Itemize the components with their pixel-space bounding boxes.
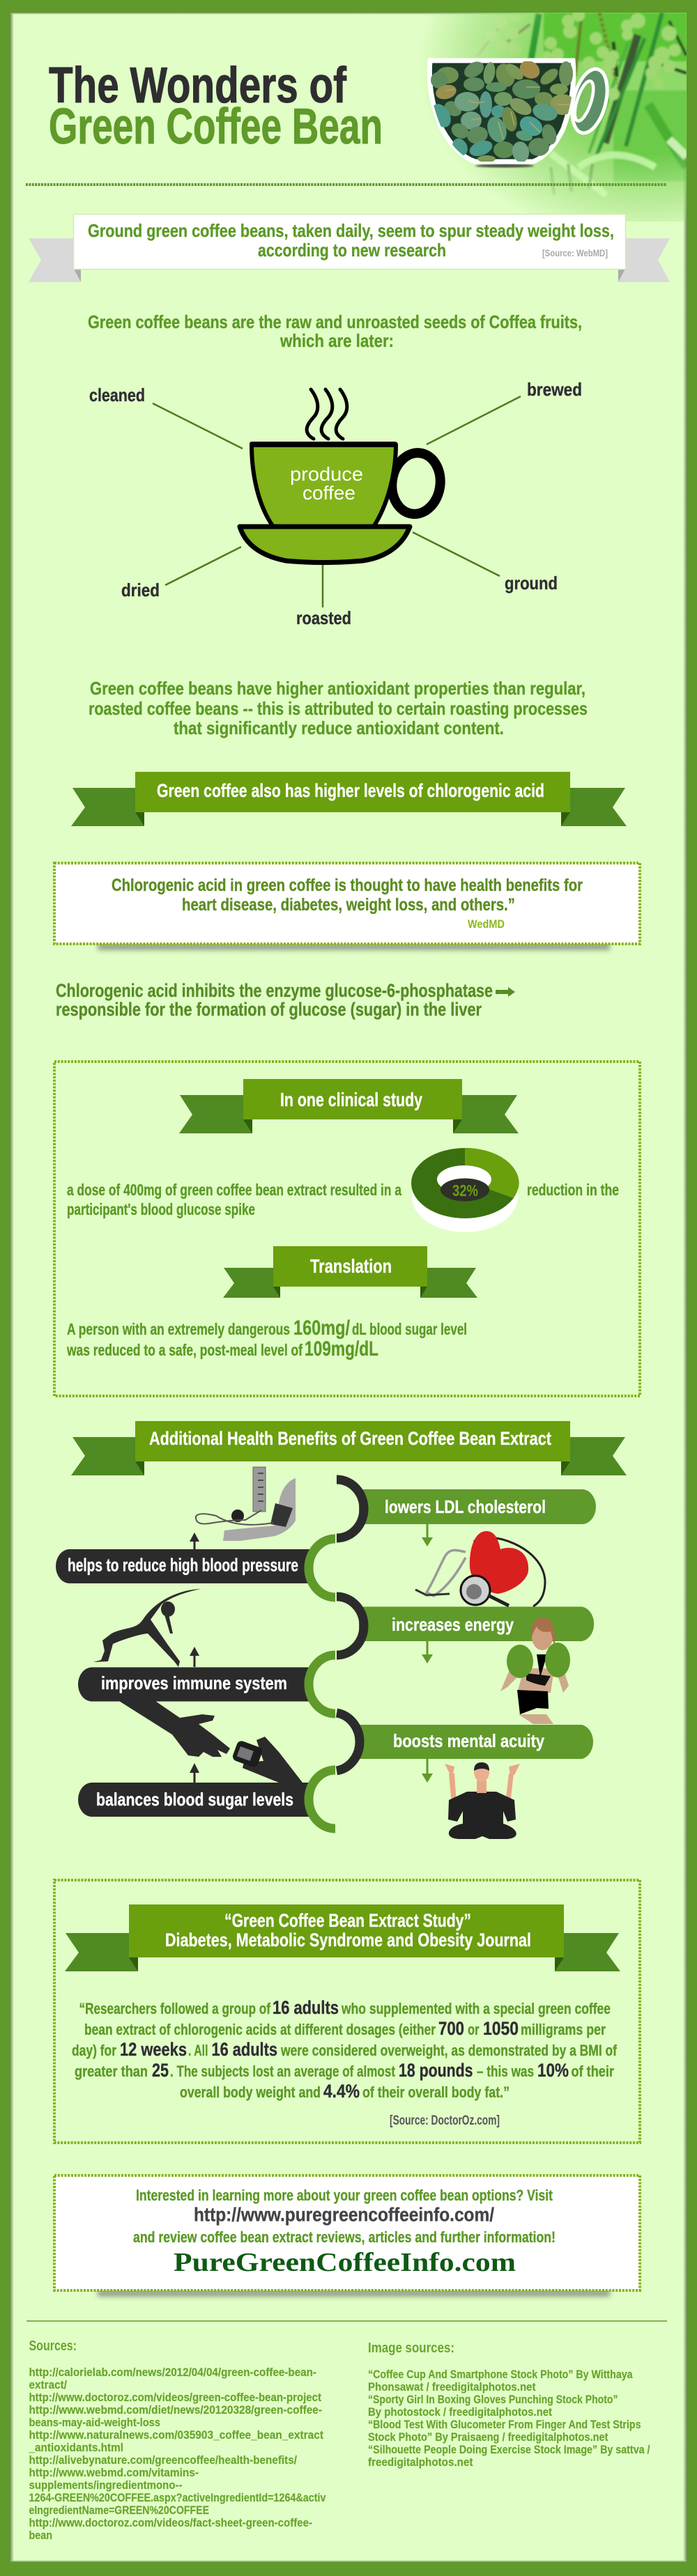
benefit labels: lowers LDL cholesterol [385,1496,546,1517]
text: raw and unroasted seeds [88,311,582,351]
title [49,58,383,155]
image sources list [368,2341,650,2469]
process labels: roasted [296,607,351,628]
translation text: 109mg/dL [305,1337,378,1360]
translation text [66,1317,467,1360]
connector arcs: dark [337,1480,364,1771]
study paragraph: 25 [152,2060,169,2081]
sources list: Sources: [29,2338,77,2354]
call to action box [54,2175,640,2297]
study paragraph [72,1997,618,2102]
study paragraph: 16 adults [273,1997,339,2018]
study text: reduction in the [527,1181,619,1199]
ribbon heading: study journal: “Green Coffee Bean Extract Study” [224,1910,471,1931]
panel: clinical study [54,1062,640,1396]
ribbon heading: study journal [65,1904,620,1971]
ribbon heading: additional health benefits [71,1421,627,1475]
translation text: A person with an extremely dangerous [67,1320,290,1338]
sources list: supplements/ingredientmono-- [29,2479,183,2492]
quote box: WebMD: heart disease, diabetes, weight loss, and others.” [182,895,515,915]
study paragraph: who supplemented with a special green coffee [341,2000,611,2017]
process labels: ground [505,573,558,593]
donut chart: 32%: 32% [452,1181,478,1200]
image sources list: By photostock / freedigitalphotos.net [368,2406,552,2419]
ribbon heading: in one clinical study [179,1079,519,1133]
benefit labels: improves immune system [101,1673,287,1693]
sources list: 1264-GREEN%20COFFEE.aspx?activeIngredientId=1264&activ [29,2492,326,2504]
study paragraph: were considered overweight, as demonstrated by a BMI of [280,2042,618,2059]
text: raw and unroasted seeds: Green coffee beans are the raw and unroasted seeds of Coffea fruits, [88,311,582,332]
ribbon heading: study journal: Diabetes, Metabolic Syndrome and Obesity Journal [165,1930,531,1950]
image sources list: Stock Photo” By Praisaeng / freedigitalphotos.net [368,2431,608,2444]
arrows: dark up [190,1533,199,1783]
study paragraph: 10% [537,2060,569,2081]
sources list [29,2338,326,2542]
sources list: eIngredientName=GREEN%20COFFEE [29,2504,209,2517]
icon: arrow [496,987,515,997]
study source: [Source: DoctorOz.com] [390,2113,500,2128]
quote box: WebMD [54,863,640,950]
benefit labels [68,1496,546,1810]
ribbon heading: translation: Translation [310,1255,392,1277]
text: enzyme inhibition: Chlorogenic acid inhibits the enzyme glucose-6-phosphatase [56,980,493,1001]
translation text: dL blood sugar level [352,1320,467,1338]
ribbon banner: weight loss claim [29,215,670,282]
process labels: dried [121,580,160,600]
icon: cup rim [250,442,397,447]
quote box: WebMD: Chlorogenic acid in green coffee is thought to have health benefits for [112,876,583,895]
study paragraph: day) for [72,2042,116,2059]
study paragraph: 16 adults [212,2039,277,2060]
diagram: coffee cup with process spokes [89,379,582,628]
text: antioxidant properties: that significantly reduce antioxidant content. [174,717,504,738]
study text [67,1181,619,1218]
sources list: beans-may-aid-weight-loss [29,2416,160,2429]
image sources list: “Blood Test With Glucometer From Finger And Test Strips [368,2419,641,2431]
sources list: http://www.naturalnews.com/035903_coffee_bean_extract [29,2429,323,2442]
image sources list: “Silhouette People Doing Exercise Stock Image” By sattva / [368,2444,650,2456]
icon: hands with glucometer [119,1701,302,1783]
connector arcs: green [309,1539,335,1829]
icon: exercise silhouette [93,1589,201,1667]
translation text: 160mg/ [293,1317,351,1340]
study paragraph: greater than [75,2063,148,2080]
ribbon heading: chlorogenic acid: Green coffee also has higher levels of chlorogenic acid [157,780,544,801]
ribbon banner: weight loss claim: [Source: WebMD] [542,247,608,258]
text: enzyme inhibition: responsible for the formation of glucose (sugar) in the liver [56,999,482,1020]
sources list: _antioxidants.html [29,2442,123,2454]
icon: steam [307,389,347,439]
text: antioxidant properties: Green coffee beans have higher antioxidant properties than regular, [90,678,585,699]
footer divider [26,2320,667,2322]
image sources list: freedigitalphotos.net [368,2456,473,2469]
study paragraph: – this was [477,2063,534,2080]
study paragraph: 18 pounds [399,2060,473,2081]
study text: a dose of 400mg of green coffee bean extract resulted in a [67,1181,401,1199]
sources list: http://www.doctoroz.com/videos/green-coffee-bean-project [29,2391,321,2404]
study paragraph: “Researchers followed a group of [79,2000,271,2017]
icon: blood pressure monitor [196,1467,296,1541]
sources list: http://alivebynature.com/greencoffee/health-benefits/ [29,2454,297,2467]
study paragraph: overall body weight and [180,2084,321,2101]
sources list: http://www.webmd.com/vitamins- [29,2467,199,2479]
process labels: brewed [527,379,582,400]
study paragraph: or [468,2021,480,2038]
sources list: http://www.doctoroz.com/videos/fact-sheet-green-coffee- [29,2517,312,2529]
process labels: cleaned [89,385,145,405]
quote box: WebMD: WedMD [468,917,505,931]
call to action box: and review coffee bean extract reviews, articles and further information! [133,2228,556,2246]
title: The Wonders of [49,58,347,114]
study paragraph: 12 weeks [120,2039,187,2060]
translation text: was reduced to a safe, post-meal level of [66,1341,302,1359]
sources list: http://www.webmd.com/diet/news/20120328/green-coffee- [29,2404,322,2416]
study paragraph: . All [188,2042,208,2059]
benefit labels: boosts mental acuity [393,1730,544,1751]
header dotted divider [26,183,667,186]
benefit labels: balances blood sugar levels [96,1789,293,1810]
process labels [89,379,582,628]
panel: benefits flow [56,1467,596,1839]
study paragraph: 700 [438,2018,464,2039]
call to action box: PureGreenCoffeeInfo.com [174,2248,516,2277]
cup label [290,463,363,504]
ribbon banner: weight loss claim: according to new research [258,240,446,261]
icon: woman boxing [500,1617,570,1724]
text: antioxidant properties [89,678,588,738]
sources list: http://calorielab.com/news/2012/04/04/green-coffee-bean- [29,2366,316,2379]
study paragraph: 4.4% [323,2081,360,2102]
sources list: bean [29,2529,52,2542]
cup label: produce [290,463,363,485]
image sources list: Phonsawat / freedigitalphotos.net [368,2381,536,2393]
study paragraph: milligrams per [521,2021,606,2038]
ribbon heading: additional health benefits: Additional Health Benefits of Green Coffee Bean Extract [149,1428,551,1449]
panel: extract study [54,1880,640,2143]
icon: heart with stethoscope [415,1531,545,1606]
study paragraph: bean extract of chlorogenic acids at different dosages (either [84,2021,436,2038]
title: Green Coffee Bean [49,99,383,155]
study paragraph: of their [572,2063,614,2080]
pills: left benefits [56,1549,312,1817]
benefit labels: increases energy [392,1614,514,1635]
benefit labels: helps to reduce high blood pressure [68,1555,298,1576]
icon: meditating man [445,1762,520,1839]
pills: right benefits [359,1489,596,1759]
study paragraph: of their overall body fat.” [362,2084,510,2101]
image sources list: Image sources: [368,2341,454,2356]
icon: cup body [252,444,396,527]
sources list: extract/ [29,2379,67,2391]
ribbon heading: in one clinical study: In one clinical study [280,1089,422,1110]
arrows: green down [422,1524,433,1783]
ribbon heading: chlorogenic acid [71,772,627,826]
header plant photo background [418,9,687,222]
donut chart: 32% [411,1148,519,1232]
study text: participant's blood glucose spike [67,1200,255,1218]
cup label: coffee [302,482,355,504]
image sources list: “Coffee Cup And Smartphone Stock Photo” By Witthaya [368,2368,633,2381]
call to action box: Interested in learning more about your green coffee bean options? Visit [136,2187,553,2204]
text: antioxidant properties: roasted coffee beans -- this is attributed to certain roasting processes [89,698,588,719]
text: raw and unroasted seeds: which are later: [279,330,394,351]
study paragraph: . The subjects lost an average of almost [170,2063,396,2080]
ribbon heading: translation [223,1246,477,1298]
call to action box: http://www.puregreencoffeeinfo.com/ [194,2204,494,2225]
icon: saucer [240,527,410,563]
study paragraph: 1050 [483,2018,519,2039]
image sources list: “Sporty Girl In Boxing Gloves Punching Stock Photo” [368,2393,618,2406]
text: enzyme inhibition [56,980,515,1020]
icon: cup handle [388,450,444,517]
icon: coffee cup filled with green beans [428,57,613,167]
